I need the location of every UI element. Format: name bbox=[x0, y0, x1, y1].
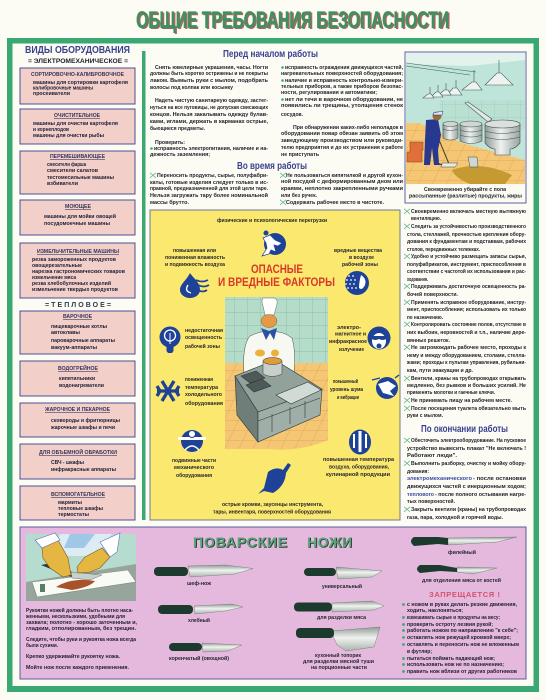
box: washing: посудомоечные машины bbox=[44, 221, 110, 227]
heading: before work: Перед началом работы bbox=[223, 48, 318, 60]
box: mixing: ПЕРЕМЕШИВАЮЩЕЕ bbox=[50, 154, 105, 160]
list: forbidden actions: использовать нож не по назначению; bbox=[407, 662, 504, 668]
box: auxiliary: тепловые шкафы bbox=[58, 505, 103, 512]
text: left column before work: Надеть чистую санитарную одежду, застег- bbox=[155, 98, 268, 104]
hazard label: low temperature: температура bbox=[185, 385, 218, 391]
text: right column during work: Применять исправное оборудование, инстру- bbox=[411, 299, 526, 306]
list: forbidden actions: в футляр; bbox=[407, 648, 432, 655]
hazard label: moving parts: оборудования bbox=[176, 472, 212, 479]
text: right column during work: Не загромождать рабочее место, проходы к bbox=[411, 344, 526, 351]
text: right column during work: дования к фундаментам и подставкам, рабочих bbox=[407, 238, 526, 245]
knife: bread: хлебный bbox=[188, 617, 210, 624]
text: right column before work: сосудов. bbox=[281, 112, 303, 118]
text: left column before work bbox=[150, 65, 269, 158]
hazard title bbox=[218, 262, 335, 289]
text: right column during work: по назначению. bbox=[407, 315, 443, 321]
box: mixing: тестомесильные машины bbox=[47, 175, 114, 181]
box: grinding bbox=[20, 243, 135, 298]
box: sorting bbox=[20, 68, 135, 104]
text: right column during work: Следить за устойчивостью производственного bbox=[411, 223, 527, 230]
text: right column during work bbox=[404, 209, 527, 419]
vertical green divider bbox=[142, 51, 146, 520]
text: right column before work: не приступать bbox=[281, 152, 320, 158]
hazard label: harmful substances: в воздухе bbox=[349, 255, 374, 261]
knife: butcher bbox=[294, 601, 384, 621]
caption bbox=[406, 184, 525, 202]
text: right column during work: Контролировать состояние полов, отсутствие в bbox=[411, 322, 527, 328]
box: frying and baking: сковороды и фритюрницы bbox=[51, 417, 120, 424]
hands bbox=[42, 540, 71, 577]
icon: runner overload bbox=[262, 230, 286, 256]
list: forbidden actions: пытаться поймать падающий нож; bbox=[407, 655, 495, 662]
section: after work bbox=[404, 423, 526, 521]
box: water heating: ВОДОГРЕЙНОЕ bbox=[58, 364, 98, 372]
list: forbidden actions: взвешивать сырые и продукты на весу; bbox=[407, 615, 500, 621]
icon: moving parts bbox=[178, 430, 206, 452]
heading: forbidden: ЗАПРЕЩАЕТСЯ ! bbox=[429, 590, 500, 599]
hazard label: humidity: пониженная влажность bbox=[165, 255, 225, 261]
box: sorting: машины для сортировки картофеля bbox=[33, 79, 128, 86]
text: right column during work: вентиляцию. bbox=[411, 216, 441, 222]
heading: chef knives: ПОВАРСКИЕ bbox=[194, 535, 288, 551]
hazard title: И ВРЕДНЫЕ ФАКТОРЫ bbox=[218, 275, 335, 289]
box: mixing: смесители фарша bbox=[47, 161, 87, 168]
cutting board bbox=[32, 570, 136, 597]
open kettle lid bbox=[465, 102, 492, 122]
text: right column during work: столов, передвижных тележках. bbox=[407, 247, 480, 253]
hazard label: low temperature: холодильного bbox=[185, 392, 222, 398]
worker bbox=[424, 111, 443, 165]
icon: noise bbox=[372, 375, 399, 399]
panel: chef knives bbox=[20, 527, 526, 679]
list: forbidden actions: с ножом в руках делать резкие движения, bbox=[407, 602, 517, 608]
text: after work: электромеханического bbox=[407, 476, 473, 482]
text: right column during work: вянных решеток. bbox=[407, 338, 450, 344]
text: knife care: Рукоятки ножей должны быть плотно наса- bbox=[26, 607, 133, 614]
box: mixing: смесители салатов bbox=[47, 168, 99, 174]
hazard label: noise: и вибрации bbox=[337, 394, 359, 401]
text: knife care: гладким, отполированным, без трещин. bbox=[26, 625, 137, 632]
hazard label: radiation: электро- bbox=[337, 325, 361, 331]
text: during work right: или без ручек. bbox=[281, 192, 317, 199]
pot bbox=[263, 358, 282, 376]
text: after work: тых поверхностей. bbox=[407, 498, 455, 505]
text: during work right bbox=[280, 172, 403, 206]
text: right column during work: кам, пути эвакуации и др. bbox=[407, 368, 473, 374]
hazard label: harmful substances bbox=[334, 248, 382, 268]
box: boiling bbox=[20, 311, 135, 354]
text: during work left: правной, предназначенной для этой цели таре. bbox=[150, 185, 268, 192]
list: forbidden actions bbox=[402, 602, 519, 675]
hazard label: moving parts bbox=[172, 458, 216, 479]
hazard label: noise bbox=[330, 378, 363, 401]
box: auxiliary: ВСПОМОГАТЕЛЬНОЕ bbox=[51, 492, 105, 498]
text: knife care: Крепко удерживайте рукоятку ножа. bbox=[26, 653, 120, 660]
box: peeling bbox=[20, 109, 135, 144]
text: right column during work: После посещения туалета обязательно мыть bbox=[411, 405, 527, 412]
box: grinding: ИЗМЕЛЬЧИТЕЛЬНЫЕ МАШИНЫ bbox=[37, 249, 119, 255]
text: after work: теплового bbox=[407, 492, 435, 498]
text: right column during work: руки с мылом. bbox=[407, 413, 443, 419]
text: right column before work: исправность ограждения движущихся частей, bbox=[285, 64, 403, 71]
hazard label: harmful substances: вредные вещества bbox=[334, 248, 382, 254]
box: mixing bbox=[20, 151, 135, 194]
text: right column before work: тельных приборов, а также приборов безопас- bbox=[281, 83, 403, 90]
text: knife care: Следите, чтобы руки и рукоятка ножа всегда bbox=[26, 636, 137, 643]
text: during work left: массы брутто. bbox=[150, 199, 189, 206]
knife: chef bbox=[154, 565, 253, 587]
box: water heating: водонагреватели bbox=[59, 383, 105, 389]
hazard label: lighting: недостаточная bbox=[185, 328, 223, 334]
text: right column before work: нагревательных поверхностей оборудования; bbox=[281, 70, 403, 77]
list: forbidden actions: править нож вблизи от других работников bbox=[407, 668, 518, 675]
text: right column before work: оборудовании повар обязан заявить об этом bbox=[281, 130, 403, 137]
hazard label: overload: физические и психологические перегрузки bbox=[217, 217, 327, 224]
knife: cleaver: на порционные части bbox=[311, 665, 367, 671]
section: before work bbox=[150, 48, 404, 158]
chopped food bbox=[56, 580, 95, 590]
text: during work left: Переносить продукты, сырье, полуфабри- bbox=[157, 172, 268, 179]
text: after work: - после остановки bbox=[473, 476, 526, 482]
spilled product bbox=[452, 166, 512, 184]
knife: cleaver: для разделки мясной туши bbox=[303, 658, 374, 665]
box: boiling: автоклавы bbox=[51, 330, 80, 336]
text: left column before work: концов. Нельзя закалывать одежду булав- bbox=[150, 111, 268, 118]
text: right column before work: наличие и исправность контрольно-измери- bbox=[285, 78, 403, 84]
knife: boning bbox=[417, 565, 501, 584]
hazard label: low temperature: оборудования bbox=[185, 400, 223, 407]
box: boiling: вакуум-аппараты bbox=[51, 345, 97, 351]
subheading: electromechanical: = ЭЛЕКТРОМЕХАНИЧЕСКОЕ = bbox=[28, 58, 128, 65]
hazard label: high temperature: повышенная температура bbox=[323, 457, 394, 463]
box: grinding: резка хлебобулочных изделий bbox=[32, 280, 112, 287]
box: washing bbox=[20, 200, 135, 235]
text: right column during work: Поддерживать достаточную освещенность ра- bbox=[411, 284, 526, 290]
text: left column before work: волосы под колпак или косынку bbox=[150, 85, 233, 91]
text: during work right: краями, неплотно закрепленными ручками bbox=[281, 186, 403, 192]
icon: face shield bbox=[368, 326, 390, 350]
text: right column before work: При обнаружении каких-либо неполадок в bbox=[293, 124, 404, 131]
box: washing: машины для мойки овощей bbox=[44, 213, 117, 220]
text: right column before work: заведующему производством или руководи- bbox=[281, 138, 403, 144]
list: forbidden actions: проверять остроту лезвия рукой; bbox=[407, 621, 493, 628]
box: grinding: овощерезательные bbox=[32, 263, 82, 269]
text: left column before work: исправность электропитания, наличие и на- bbox=[154, 146, 268, 152]
caption: рассыпанные (разлитые) продукты, жиры bbox=[409, 194, 522, 200]
text: after work: устройство вывесить плакат "Не включать ! bbox=[407, 445, 526, 452]
hazard label: humidity: повышенная или bbox=[173, 248, 216, 254]
text: left column before work: Проверить: bbox=[155, 140, 185, 146]
icon: dust sphere bbox=[345, 271, 369, 295]
box: grinding: нарезка гастрономических товаров bbox=[32, 269, 126, 275]
section: during work bbox=[150, 160, 403, 206]
subheading: thermal: =ТЕПЛОВОЕ= bbox=[45, 302, 111, 309]
text: knife care: женными, нескользкими, удобными для bbox=[25, 613, 125, 620]
text: left column before work: ками, иглами, держать в карманах острые, bbox=[150, 119, 269, 125]
text: after work: Закрыть вентили (краны) на трубопроводах bbox=[411, 506, 526, 513]
stove bbox=[235, 360, 322, 442]
text: left column before work: дежность заземления; bbox=[150, 152, 210, 158]
box: frying and baking: жарочные шкафы и печи bbox=[50, 424, 116, 431]
text: left column before work: Снять ювелирные украшения, часы. Ногти bbox=[155, 65, 268, 71]
knife: universal bbox=[304, 567, 382, 590]
box: frying and baking: ЖАРОЧНОЕ И ПЕКАРНОЕ bbox=[44, 407, 110, 413]
bucket bbox=[468, 157, 478, 167]
text: right column during work: Не принимать пищу на рабочем месте. bbox=[411, 397, 512, 404]
mop bbox=[437, 135, 449, 164]
box: volumetric processing: СВЧ - шкафы bbox=[51, 459, 84, 466]
text: right column during work: бочей поверхности. bbox=[407, 291, 458, 298]
hazard label: sharp edges: острые кромки, заусенцы инструмента, bbox=[222, 502, 324, 508]
text: after work: движущихся частей с инерционным ходом; bbox=[407, 483, 526, 490]
list: forbidden actions: оставлять и переносить нож не вложенным bbox=[407, 642, 519, 648]
icon: snowflake bbox=[157, 381, 179, 401]
box: volumetric processing bbox=[20, 444, 135, 479]
box: grinding: измельчение мяса bbox=[32, 275, 77, 281]
text: after work: газа, пара, холодной и горячей воды. bbox=[407, 514, 503, 521]
hazard label: low temperature bbox=[185, 377, 223, 407]
list: forbidden actions: работать ножом по направлению "к себе"; bbox=[407, 627, 518, 634]
panel: equipment types bbox=[20, 45, 135, 520]
hazard label: radiation: излучение bbox=[339, 347, 364, 353]
box: auxiliary: мармиты bbox=[58, 500, 82, 506]
box: frying and baking bbox=[20, 403, 135, 437]
text: right column during work: стола, стеллажей, прочностью крепления обору- bbox=[407, 231, 526, 238]
icon: thermometer bbox=[349, 430, 371, 454]
box: mixing: взбиватели bbox=[47, 180, 79, 187]
hazard label: radiation: инфракрасное bbox=[329, 338, 367, 345]
orange boxes bbox=[407, 142, 423, 162]
box: sorting: СОРТИРОВОЧНО-КАЛИБРОВОЧНОЕ bbox=[31, 72, 124, 78]
heading: chef knives: ПОВАРСКИЕ bbox=[193, 534, 287, 550]
text: right column during work: нему и между оборудованием, столами, стелла- bbox=[407, 352, 526, 359]
ceiling rails and hoods bbox=[406, 60, 513, 98]
hazard label: low temperature: пониженная bbox=[185, 377, 213, 383]
box: grinding: измельчение твердых продуктов bbox=[32, 287, 119, 293]
hazard label: lighting bbox=[185, 328, 223, 350]
hazard label: lighting: освещенность bbox=[185, 335, 222, 341]
hazard label: moving parts: механического bbox=[174, 465, 214, 471]
heading: during work: Во время работы bbox=[237, 160, 307, 172]
hazard label: humidity: и подвижность воздуха bbox=[165, 262, 225, 268]
hazard label: high temperature: воздуха, оборудования, bbox=[329, 464, 390, 470]
hazard label: radiation bbox=[329, 325, 367, 353]
box: grinding: резка замороженных продуктов bbox=[32, 257, 117, 263]
text: during work right: ной посудой с деформированным дном или bbox=[281, 178, 403, 185]
heading: chef knives bbox=[193, 534, 353, 551]
hazard label: noise: уровень шума bbox=[330, 387, 363, 393]
knife: boning: для отделения мяса от костей bbox=[422, 577, 501, 584]
text: left column before work: нуться на все пуговицы, не допуская свисающих bbox=[150, 105, 268, 111]
hazard label: sharp edges: тары, инвентаря, поверхностей оборудования bbox=[213, 508, 331, 516]
text: right column during work: жами; проходы к пультам управления, рубильни- bbox=[406, 359, 526, 366]
knife: fillet: филейный bbox=[448, 549, 476, 556]
knife: chef: шеф-нож bbox=[187, 580, 211, 587]
text: right column during work: Своевременно включать местную вытяжную bbox=[411, 209, 526, 215]
text: after work: - после полного остывания нагре- bbox=[435, 492, 526, 498]
kettles bbox=[443, 120, 520, 155]
text: right column before work: телю предприятия и до их устранения к работе bbox=[281, 144, 403, 151]
text: right column during work: ходования. bbox=[407, 277, 428, 283]
text: during work left: Нельзя загружать тару более номинальной bbox=[150, 192, 268, 199]
caption: Своевременно убирайте с пола bbox=[424, 186, 507, 193]
box: sorting: просеиватели bbox=[33, 91, 71, 97]
heading: after work: По окончании работы bbox=[421, 423, 508, 435]
chef bbox=[244, 298, 295, 374]
box: volumetric processing: инфракрасные аппараты bbox=[51, 466, 116, 473]
box: boiling: пищеварочные котлы bbox=[51, 324, 107, 330]
hazard label: noise: повышенный bbox=[333, 378, 358, 385]
hazard label: humidity bbox=[165, 248, 225, 268]
hazard label: radiation: магнитное и bbox=[335, 332, 366, 338]
knife: cleaver bbox=[296, 627, 380, 671]
text: right column during work: медленно, без рывков и больших усилий. Не bbox=[407, 382, 526, 389]
box: peeling: машины для очистки картофеля bbox=[33, 120, 118, 127]
text: right column before work bbox=[281, 64, 404, 158]
hazard label: sharp edges bbox=[213, 502, 331, 516]
box: water heating bbox=[20, 361, 135, 396]
text: left column before work: лаком. Вымыть руки с мылом, подобрать bbox=[150, 77, 269, 84]
text: during work right: Не пользоваться кипятилкой и другой кухон- bbox=[286, 172, 403, 179]
heading: chef knives: НОЖИ bbox=[307, 534, 352, 550]
hazard label: harmful substances: рабочей зоны bbox=[342, 261, 379, 268]
text: right column before work: нет ли течи в варочном оборудовании, не bbox=[285, 96, 403, 103]
list: forbidden actions: оставлять нож режущей кромкой вверх; bbox=[407, 634, 511, 641]
box: boiling: пароварочные аппараты bbox=[51, 338, 115, 344]
text: right column during work: Удобно и устойчиво размещать запасы сырья, bbox=[411, 253, 526, 260]
text: right column during work: соответствии с частотой их использования и рас- bbox=[407, 268, 526, 275]
text: during work left: каты, готовые изделия следует только в ис- bbox=[150, 180, 268, 186]
box: water heating: кипятильники bbox=[59, 376, 96, 382]
box: auxiliary: термостаты bbox=[58, 512, 89, 518]
icon: light bulb bbox=[160, 326, 180, 353]
text: after work: Работают люди". bbox=[407, 452, 458, 459]
text: right column during work: применять молотки и гаечные ключи. bbox=[407, 390, 495, 396]
knife: paring bbox=[169, 643, 242, 662]
hazard label: high temperature bbox=[323, 457, 394, 478]
text: after work: Выполнить разборку, очистку и мойку обору- bbox=[411, 460, 526, 467]
list: forbidden actions: ходить, наклоняться; bbox=[407, 608, 463, 614]
knife: bread bbox=[158, 604, 243, 624]
hazard title: ОПАСНЫЕ bbox=[251, 262, 303, 276]
box: volumetric processing: ДЛЯ ОБЪЕМНОЙ ОБРАБОТКИ bbox=[39, 448, 117, 456]
text: left column before work: должны быть коротко острижены и не покрыты bbox=[150, 70, 268, 77]
illustration: hands cutting on a board bbox=[26, 533, 136, 601]
box: peeling: и корнеплодов bbox=[33, 127, 69, 133]
text: right column during work: мент, приспособления; использовать их только bbox=[407, 306, 527, 313]
knife: fillet bbox=[411, 537, 517, 556]
knife bbox=[41, 564, 73, 577]
text: knife care bbox=[25, 607, 137, 671]
icon: sharp knife bbox=[258, 463, 291, 494]
box: washing: МОЮЩЕЕ bbox=[65, 204, 91, 210]
knife: paring: коренчатый (овощной) bbox=[169, 655, 229, 662]
hazard label: lighting: рабочей зоны bbox=[185, 343, 221, 350]
illustration: cleaning the floor bbox=[405, 52, 526, 203]
text: knife care: захвата; полотно - хорошо заточенным и, bbox=[26, 620, 137, 626]
text: right column before work: ности, регулирования и автоматики; bbox=[281, 90, 377, 96]
box: auxiliary bbox=[20, 486, 135, 520]
hazard label: moving parts: подвижные части bbox=[172, 458, 216, 464]
text: during work right: Содержать рабочее место в чистоте. bbox=[286, 199, 384, 206]
box: peeling: ОЧИСТИТЕЛЬНОЕ bbox=[54, 113, 100, 119]
text: right column during work: полуфабрикатов, инструмент, приспособления в bbox=[407, 261, 527, 268]
box: sorting: калибровочные машины bbox=[33, 84, 93, 92]
knife: universal: универсальный bbox=[322, 583, 362, 590]
wall and floor bbox=[406, 53, 525, 160]
box: boiling: ВАРОЧНОЕ bbox=[63, 314, 92, 320]
icon: humidity drop bbox=[180, 273, 209, 298]
text: right column during work: них выбоин, неровностей и т.п., наличие дере- bbox=[407, 329, 526, 336]
text: after work: дования: bbox=[407, 469, 429, 475]
knife: butcher: для разделки мяса bbox=[317, 615, 366, 621]
panel: hazards bbox=[150, 210, 400, 520]
box: peeling: машины для очистки рыбы bbox=[33, 132, 104, 139]
text: knife care: Мойте нож после каждого применения. bbox=[26, 664, 129, 671]
illustration: chef at stove bbox=[225, 297, 328, 450]
heading: equipment types: ВИДЫ ОБОРУДОВАНИЯ bbox=[25, 45, 130, 56]
text: right column during work: Вентили, краны на трубопроводах открывать bbox=[411, 375, 527, 382]
hazard label: high temperature: кулинарной продукции bbox=[326, 471, 390, 478]
text: right column before work: появились ли трещины, утолщения стенок bbox=[281, 103, 403, 109]
text: during work left bbox=[150, 172, 268, 206]
text: after work bbox=[404, 437, 526, 521]
text: after work: Обесточить электрооборудование. На пусковое bbox=[411, 437, 526, 444]
text: knife care: были сухими. bbox=[26, 642, 58, 649]
knife: cleaver: кухонный топорик bbox=[315, 652, 361, 659]
text: left column before work: бьющиеся предметы. bbox=[150, 125, 205, 132]
heading: chef knives: НОЖИ bbox=[308, 535, 353, 551]
